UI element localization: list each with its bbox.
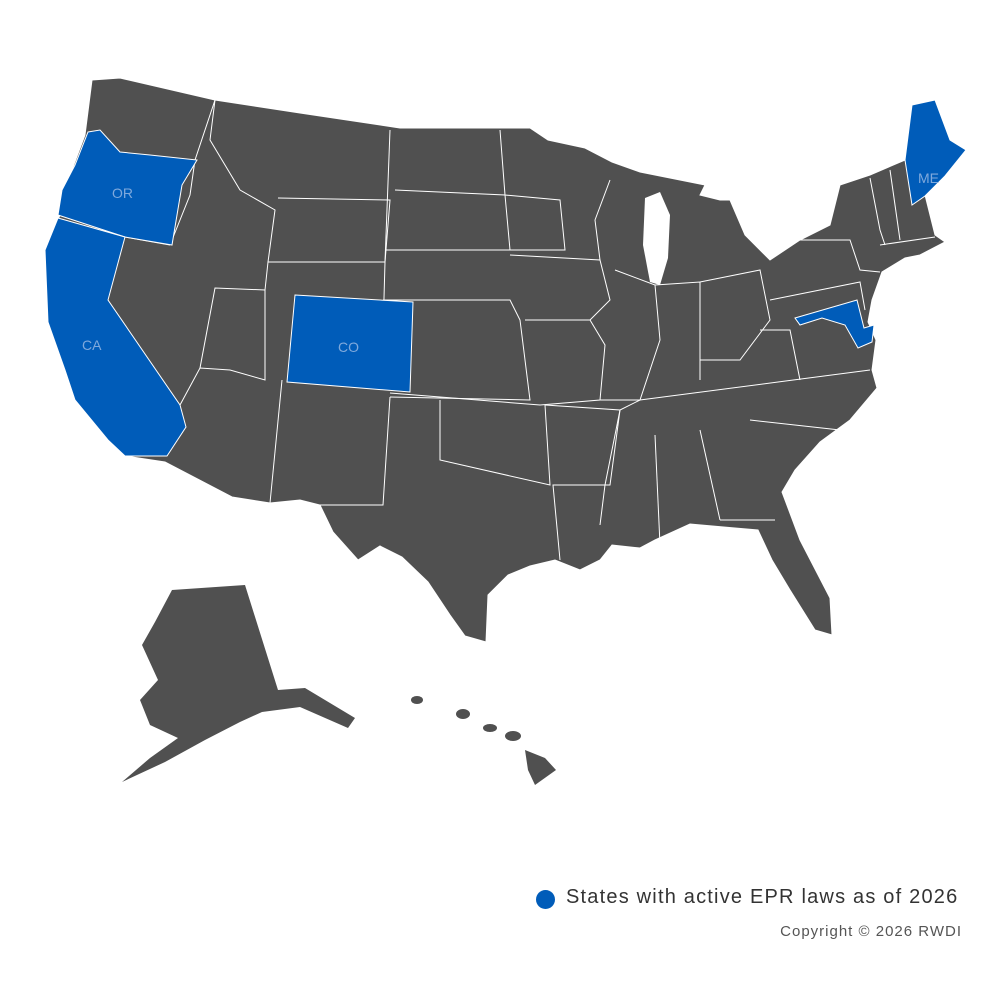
contiguous US <box>45 78 945 642</box>
blue states <box>45 100 966 456</box>
state labels: CO <box>338 339 359 355</box>
OR <box>58 130 197 245</box>
lake michigan <box>643 192 670 285</box>
hawaii <box>411 696 556 785</box>
legend text: States with active EPR laws as of 2026 <box>566 886 958 908</box>
alaska <box>122 585 355 782</box>
state borders <box>125 100 935 560</box>
state labels: OR <box>112 185 133 201</box>
ME <box>905 100 966 205</box>
CA <box>45 218 186 456</box>
state labels: ME <box>918 170 939 186</box>
state labels <box>82 170 939 355</box>
legend <box>536 886 958 909</box>
copyright: Copyright © 2026 RWDI <box>780 923 962 940</box>
MD <box>795 300 874 348</box>
legend dot <box>536 890 555 909</box>
CO <box>287 295 413 392</box>
state labels: CA <box>82 337 102 353</box>
